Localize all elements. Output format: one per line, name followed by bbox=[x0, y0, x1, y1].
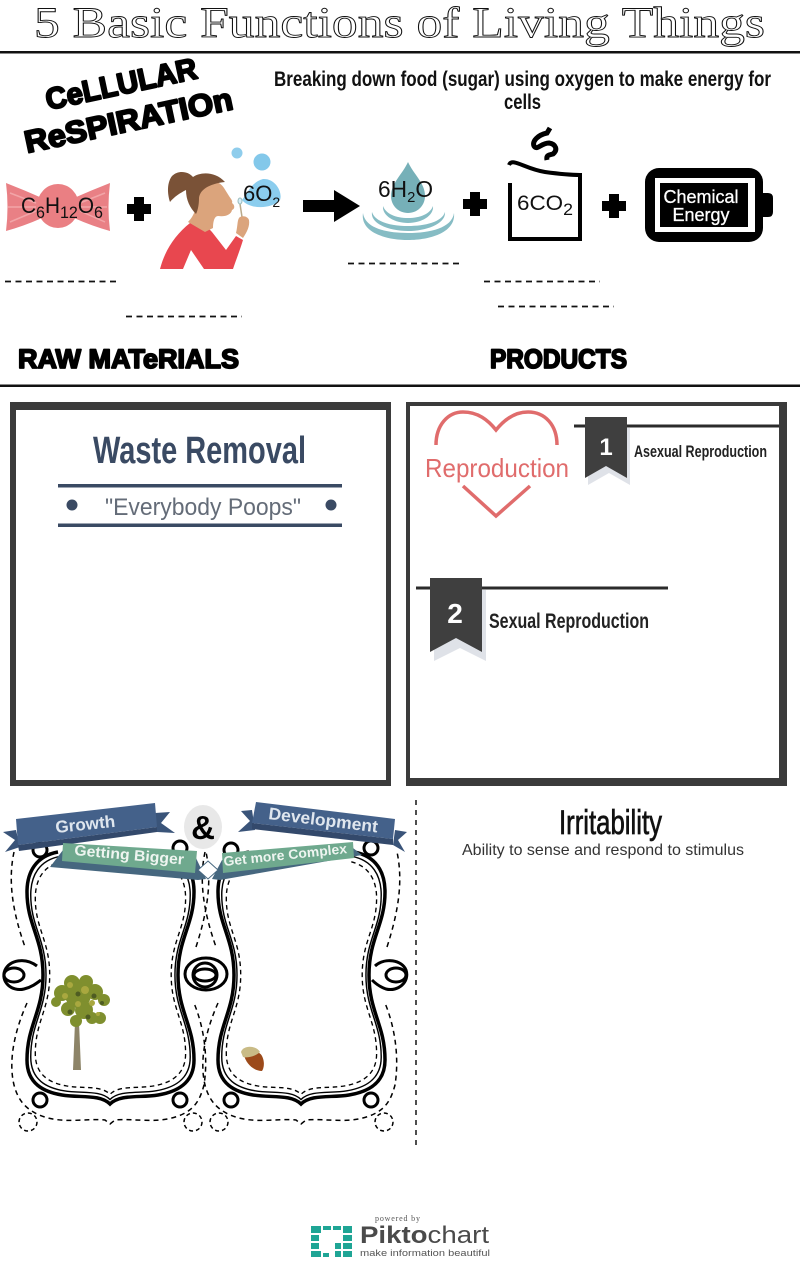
ribbon: development bbox=[238, 802, 407, 852]
heading: waste removal: Waste Removal bbox=[93, 430, 306, 472]
panel: waste removal bbox=[10, 402, 391, 786]
ribbon: get more complex: Get more Complex bbox=[223, 841, 348, 869]
heading: cellular respiration: CeLLULAR bbox=[43, 52, 200, 117]
icon: candy glucose bbox=[6, 183, 110, 231]
ribbon: getting bigger bbox=[50, 842, 206, 880]
icon: carbon dioxide box with smoke: 6CO bbox=[517, 191, 561, 215]
icon: girl blowing bubbles, oxygen bbox=[160, 148, 281, 269]
side curls bbox=[4, 958, 407, 990]
definition text: cells bbox=[504, 91, 541, 114]
left ornate frame bbox=[11, 841, 209, 1131]
panel: reproduction bbox=[406, 402, 787, 786]
icon: battery chemical energy bbox=[645, 168, 773, 242]
logo: piktochart: make information beautiful bbox=[360, 1248, 490, 1259]
icon: candy glucose: O bbox=[78, 193, 94, 218]
icon: water drop bbox=[363, 162, 454, 240]
heading: irritability: Irritability bbox=[559, 804, 662, 842]
panel: irritability bbox=[462, 804, 744, 859]
icon: battery chemical energy: Chemical bbox=[663, 187, 739, 207]
description: Ability to sense and respond to stimulus bbox=[462, 842, 744, 859]
icon: girl blowing bubbles, oxygen: 2 bbox=[272, 194, 280, 210]
icon: carbon dioxide box with smoke bbox=[509, 128, 580, 239]
ribbon: getting bigger: Getting Bigger bbox=[74, 842, 185, 869]
logo icon bbox=[311, 1226, 352, 1257]
panel: cellular respiration bbox=[5, 52, 773, 374]
label: raw materials: RAW MATeRIALS bbox=[18, 344, 239, 374]
right ornate frame bbox=[202, 841, 400, 1131]
icon: carbon dioxide box with smoke: 2 bbox=[563, 200, 573, 219]
item 1: asexual reproduction bbox=[574, 417, 779, 485]
icon: water drop: 2 bbox=[407, 189, 415, 206]
icon: heart with reproduction label: Reproduction bbox=[425, 453, 569, 483]
icon: candy glucose: H bbox=[45, 193, 60, 218]
panel: growth and development bbox=[3, 802, 407, 1131]
icon: candy glucose: 12 bbox=[60, 203, 78, 222]
ribbon: get more complex bbox=[212, 841, 362, 880]
tagline: everybody poops bbox=[58, 484, 342, 527]
icon: plus bbox=[127, 197, 151, 221]
tagline: everybody poops: "Everybody Poops" bbox=[105, 494, 301, 521]
icon: candy glucose: C bbox=[21, 193, 37, 218]
item 2: sexual reproduction: Sexual Reproduction bbox=[489, 610, 649, 633]
ribbon: growth bbox=[3, 803, 175, 852]
icon: water drop: 6H bbox=[378, 176, 407, 202]
icon: acorn bbox=[241, 1047, 264, 1071]
definition text bbox=[274, 68, 771, 114]
icon: water drop: O bbox=[415, 176, 433, 202]
label: products: PRODUCTS bbox=[490, 344, 627, 374]
icon: plus bbox=[602, 194, 626, 218]
heading: cellular respiration: ReSPIRATIOn bbox=[21, 82, 236, 160]
icon: heart with reproduction label bbox=[425, 412, 569, 516]
icon: tree bbox=[51, 975, 110, 1070]
ampersand badge bbox=[184, 805, 222, 849]
ampersand badge: & bbox=[191, 809, 215, 846]
logo: piktochart: powered by bbox=[375, 1214, 420, 1223]
heading: cellular respiration bbox=[21, 52, 236, 160]
ribbon: development: Development bbox=[268, 804, 379, 836]
item 2: sexual reproduction bbox=[416, 578, 668, 661]
logo: piktochart: Pikto chart bbox=[360, 1222, 489, 1249]
icon: candy glucose: 6 bbox=[36, 203, 45, 222]
arrow bbox=[303, 190, 360, 222]
logo: piktochart bbox=[311, 1214, 490, 1259]
icon: plus bbox=[463, 192, 487, 216]
ribbon: growth: Growth bbox=[54, 812, 116, 837]
icon: girl blowing bubbles, oxygen: 6O bbox=[243, 181, 272, 206]
icon: battery chemical energy: Energy bbox=[672, 205, 730, 225]
item 2: sexual reproduction: 2 bbox=[447, 598, 463, 629]
item 1: asexual reproduction: 1 bbox=[599, 434, 613, 461]
diamond connector bbox=[198, 861, 218, 879]
icon: candy glucose: 6 bbox=[94, 203, 103, 222]
title: 5 Basic Functions of Living Things bbox=[34, 0, 765, 47]
